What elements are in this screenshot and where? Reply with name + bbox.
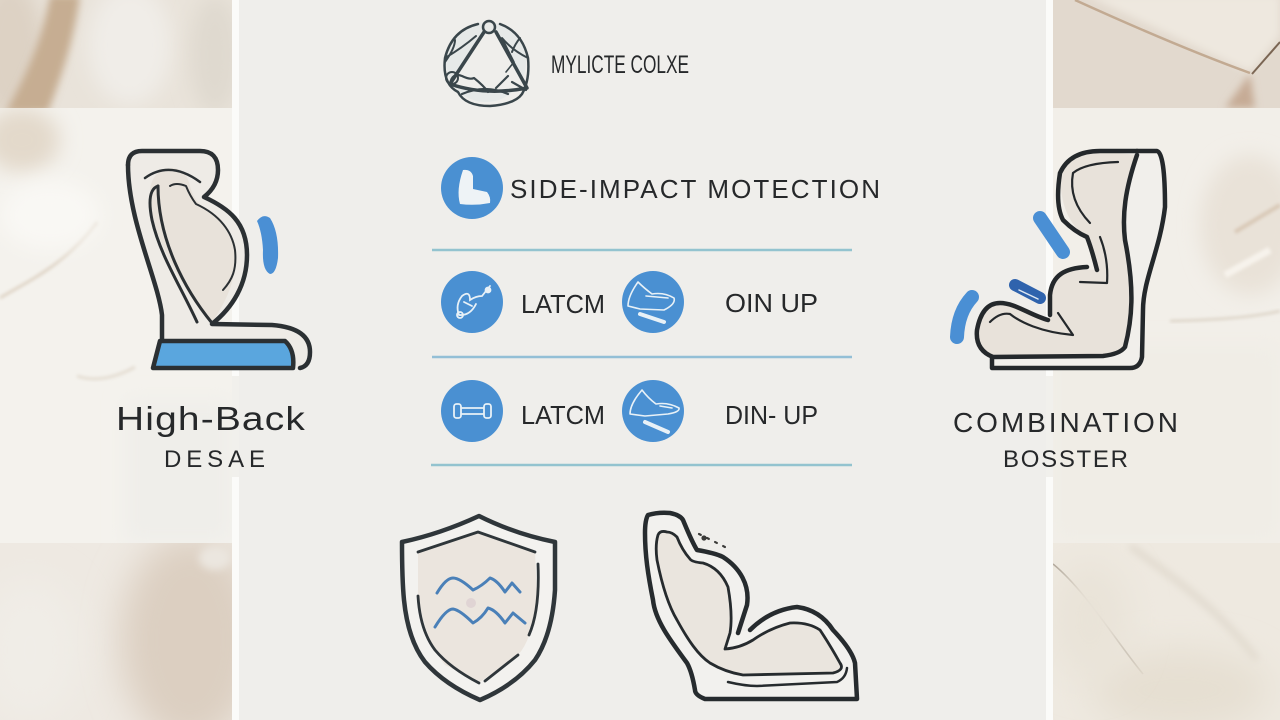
label: combination booster name: BOSSTER [1003, 446, 1128, 473]
row: side-impact protection [441, 157, 880, 219]
label: latch: LATCM [521, 400, 605, 430]
panel: right fabric background [1050, 0, 1280, 720]
panel: center column [232, 0, 1053, 720]
divider [432, 356, 852, 358]
label: side-impact protection: SIDE-IMPACT MOTECTION [510, 174, 880, 204]
icon: mesh sphere logo [445, 21, 528, 106]
divider [431, 464, 852, 466]
icon: seat with strap [622, 380, 684, 442]
title: top feature label: MYLICTE COLXE [551, 51, 689, 79]
label: high-back booster name: DESAE [164, 446, 265, 473]
icon: buckle bar [441, 380, 503, 442]
icon: side-impact seat [441, 157, 503, 219]
label: latch: LATCM [521, 289, 605, 319]
panel: left fabric background [0, 0, 232, 720]
icon: shield with waves [402, 516, 555, 700]
icon: contoured seat outline [645, 513, 857, 699]
label: high-back booster name: High-Back [116, 400, 306, 437]
icon: seat with strap [622, 271, 684, 333]
label: high-back booster name [116, 400, 306, 473]
label: din up: OIN UP [725, 288, 818, 318]
icon: combination booster seat [957, 151, 1165, 368]
row: first LATCH and DIN UP [441, 271, 818, 333]
divider [432, 249, 852, 251]
label: combination booster name: COMBINATION [953, 407, 1178, 438]
row: second LATCH and DIN UP [441, 380, 818, 442]
label: din up: DIN- UP [725, 400, 818, 430]
label: combination booster name [953, 407, 1178, 473]
icon: high-back booster seat [128, 151, 310, 368]
icon: latch connector [441, 271, 503, 333]
